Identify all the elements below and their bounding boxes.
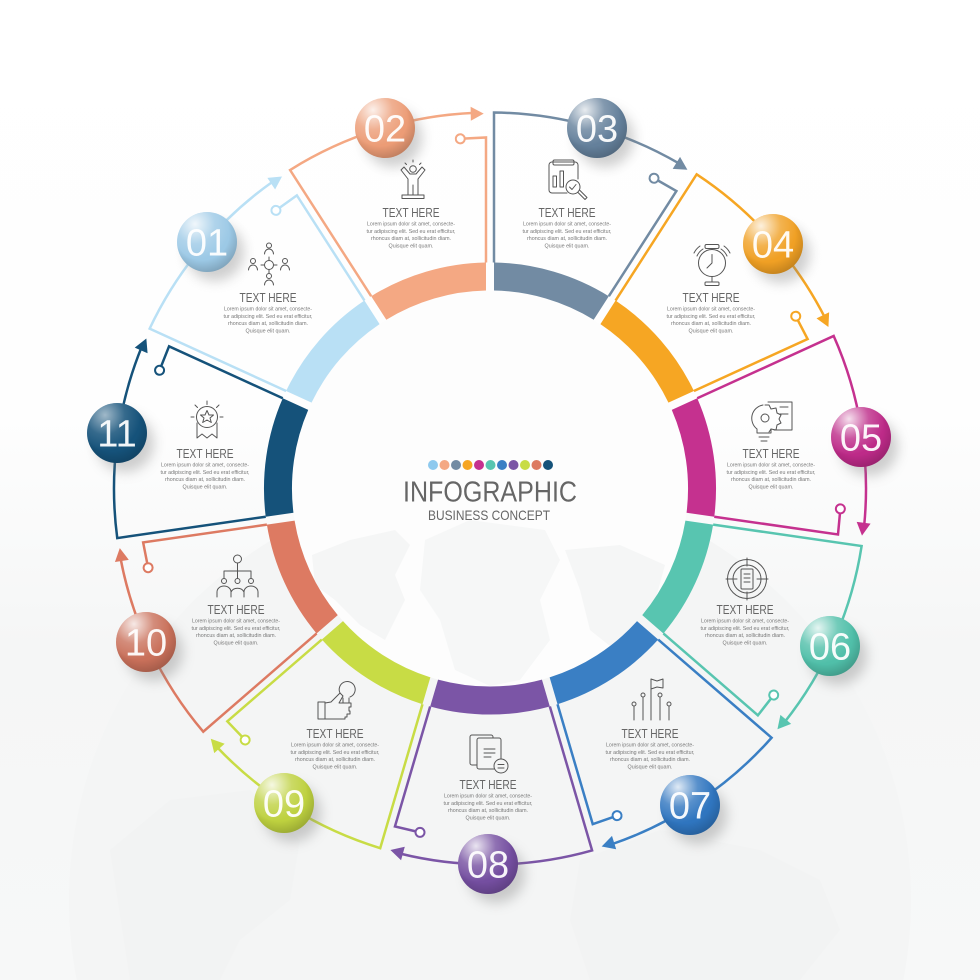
text block 10: TEXT HERE [208,603,264,617]
text block 07: rhoncus diam at, sollicitudin diam. [610,757,690,763]
ring segment and outline 10 [107,477,359,738]
number ball 02: 02 [364,108,406,150]
text block 02: tur adipiscing elit. Sed eu erat efficitur, [366,229,456,235]
text block 04: rhoncus diam at, sollicitudin diam. [671,321,751,327]
text block 05 [726,447,816,490]
text block 09: tur adipiscing elit. Sed eu erat efficitur, [290,750,380,756]
text block 07: Quisque elit quam. [628,764,673,770]
icon: network of people [248,243,290,285]
text block 02: TEXT HERE [382,206,440,220]
number ball 08: 08 [467,844,509,886]
number ball 07: 07 [669,786,711,828]
ring segment and outline 09 [203,595,473,860]
text block 02: Quisque elit quam. [388,244,434,250]
text block 08 [444,778,533,822]
text block 10: Lorem ipsum dolor sit amet, consecte- [192,618,280,624]
text block 05: Lorem ipsum dolor sit amet, consecte- [727,462,815,468]
text block 03: TEXT HERE [538,206,596,220]
text block 06: Quisque elit quam. [722,640,768,646]
text block 06: tur adipiscing elit. Sed eu erat efficitur, [700,626,790,632]
text block 03: rhoncus diam at, sollicitudin diam. [527,236,607,242]
text block 05: rhoncus diam at, sollicitudin diam. [731,477,811,483]
ring segment and outline 07 [510,594,779,859]
text block 09: Quisque elit quam. [312,764,358,770]
number ball 11 [87,403,154,472]
text block 03: Quisque elit quam. [544,244,590,250]
text block 07: TEXT HERE [622,727,678,741]
panel: step 02 [286,98,532,334]
text block 01: Lorem ipsum dolor sit amet, consecte- [224,306,312,312]
number ball 02 [355,98,422,167]
text block 08: Quisque elit quam. [466,816,511,822]
text block 09: Lorem ipsum dolor sit amet, consecte- [291,742,379,748]
text block 11: tur adipiscing elit. Sed eu erat efficitur, [160,470,250,476]
icon: light bulb with gear and document [752,402,792,441]
icon: award ribbon [191,401,223,438]
icon: thumbs up with bulb [318,682,355,719]
text block 04: Quisque elit quam. [688,328,734,334]
text block 07: tur adipiscing elit. Sed eu erat efficitur, [606,750,695,756]
panel: step 11 [87,336,315,562]
text block 01: TEXT HERE [240,291,296,305]
number ball 11: 11 [97,414,137,456]
text block 02: Lorem ipsum dolor sit amet, consecte- [367,222,455,228]
text block 06: rhoncus diam at, sollicitudin diam. [705,633,785,639]
centre colour dots [428,460,553,470]
icon: alarm clock [694,244,730,286]
panel: step 07 [510,594,779,859]
text block 05: tur adipiscing elit. Sed eu erat efficitur, [726,470,816,476]
text block 11: Quisque elit quam. [182,484,228,490]
ring segment and outline 01 [139,167,411,441]
text block 11: Lorem ipsum dolor sit amet, consecte- [161,462,249,468]
text block 07 [606,727,695,770]
text block 04 [666,291,756,334]
panel: step 03 [446,98,692,333]
text block 03 [522,206,612,250]
ring segment and outline 04 [568,165,839,439]
text block 01 [224,291,313,334]
number ball 04: 04 [752,224,794,266]
number ball 05: 05 [840,418,882,460]
number ball 08 [458,834,525,903]
ring segment and outline 02 [286,100,532,334]
text block 03: tur adipiscing elit. Sed eu erat efficitur, [522,229,612,235]
subtitle: BUSINESS CONCEPT [428,507,550,523]
text block 11: TEXT HERE [176,447,234,461]
ring segment and outline 03 [446,99,692,333]
title: INFOGRAPHIC [403,476,577,508]
number ball 06: 06 [809,626,851,668]
panel: step 05 [665,334,898,560]
text block 01: rhoncus diam at, sollicitudin diam. [228,321,308,327]
ring segment and outline 06 [622,475,874,735]
number ball 09: 09 [263,784,305,826]
number ball 05 [831,407,898,476]
number ball 03: 03 [576,108,618,150]
panel: step 04 [568,165,839,439]
panel: step 06 [622,475,874,735]
text block 10: rhoncus diam at, sollicitudin diam. [196,633,276,639]
number ball 09 [254,773,321,842]
text block 11 [160,447,250,490]
number ball 10: 10 [125,622,167,664]
text block 06: TEXT HERE [716,603,774,617]
ring segment and outline 11 [103,336,315,562]
text block 06: Lorem ipsum dolor sit amet, consecte- [701,618,789,624]
text block 05: Quisque elit quam. [748,484,794,490]
text block 09 [290,727,380,770]
number ball 07 [660,775,727,844]
text block 01: Quisque elit quam. [246,328,291,334]
icon: documents [470,735,508,773]
number ball 10 [116,612,183,681]
text block 02: rhoncus diam at, sollicitudin diam. [371,236,451,242]
text block 07: Lorem ipsum dolor sit amet, consecte- [606,742,694,748]
text block 09: TEXT HERE [306,727,364,741]
text block 10: tur adipiscing elit. Sed eu erat efficitur, [192,626,281,632]
text block 08: tur adipiscing elit. Sed eu erat efficitur, [444,801,533,807]
text block 04: Lorem ipsum dolor sit amet, consecte- [667,306,755,312]
text block 01: tur adipiscing elit. Sed eu erat efficitur, [224,314,313,320]
text block 04: TEXT HERE [682,291,740,305]
icon: organisation chart [217,555,258,597]
panel: step 01 [139,167,411,441]
text block 04: tur adipiscing elit. Sed eu erat efficitur, [666,314,756,320]
text block 06 [700,603,790,646]
icon: person celebrating on podium [401,160,425,198]
text block 10: Quisque elit quam. [214,640,259,646]
number ball 01 [177,212,244,281]
text block 03: Lorem ipsum dolor sit amet, consecte- [523,222,611,228]
text block 10 [192,603,281,646]
icon: flag and pins [632,679,671,720]
text block 05: TEXT HERE [742,447,800,461]
text block 08: rhoncus diam at, sollicitudin diam. [448,808,528,814]
text block 08: Lorem ipsum dolor sit amet, consecte- [444,794,532,800]
number ball 01: 01 [186,222,228,264]
text block 08: TEXT HERE [460,778,516,792]
background globe with continents [69,290,911,980]
panel: step 10 [107,477,359,738]
number ball 06 [800,616,867,685]
text block 09: rhoncus diam at, sollicitudin diam. [295,757,375,763]
icon: clipboard with magnifier [549,160,587,200]
text block 11: rhoncus diam at, sollicitudin diam. [165,477,245,483]
number ball 03 [567,98,634,167]
icon: target with document [726,558,768,600]
ring segment and outline 05 [665,334,876,560]
panel: step 08 [390,680,592,903]
text block 02 [366,206,456,250]
ring segment and outline 08 [390,680,592,865]
panel: step 09 [203,595,473,860]
number ball 04 [743,214,810,283]
